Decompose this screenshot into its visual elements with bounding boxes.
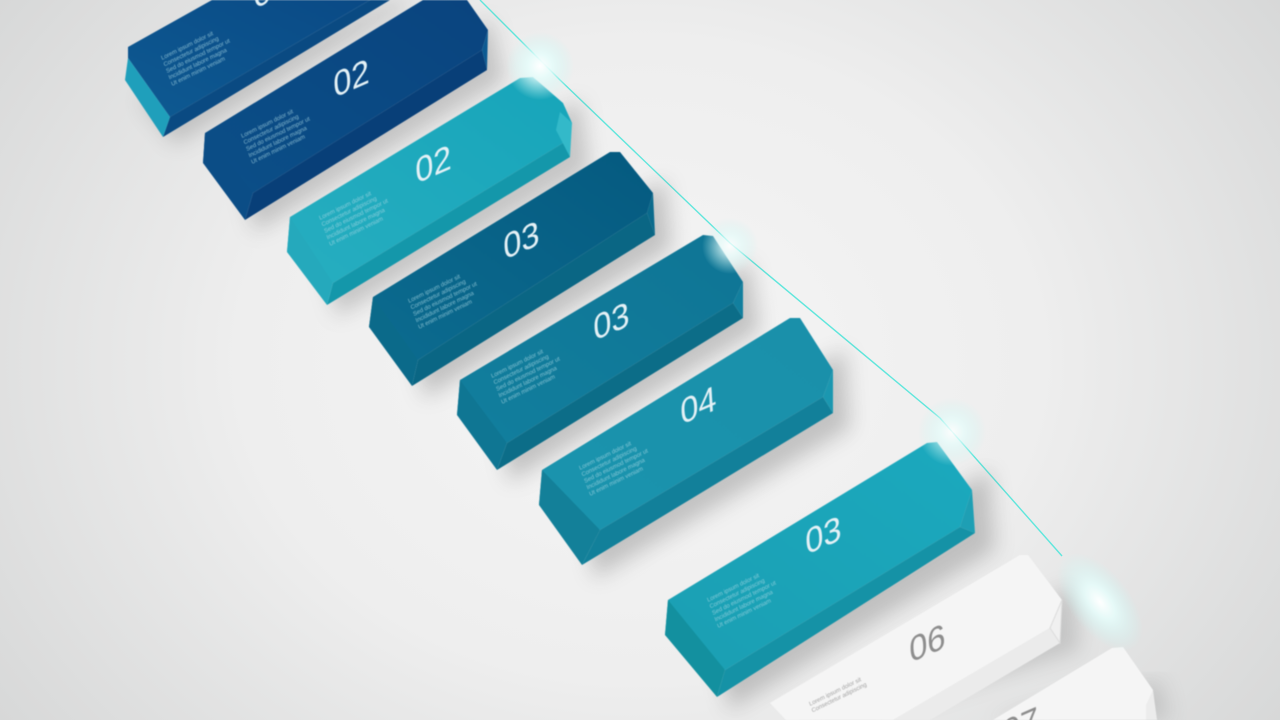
text block 03 deep: Incididunt labore magna [415,290,475,324]
text block 03 mid: Ut enim minim veniam [501,374,556,406]
text block 02 navy: Lorem ipsum dolor sit [241,109,295,140]
text block 03 bright: Consectetur adipiscing [709,578,766,610]
text block 03 deep: Sed do eiusmod tempor ut [413,281,478,318]
bar 05: mid teal blue [457,235,760,482]
number 03 bright: 03 [804,508,842,563]
text block 01: Incididunt labore magna [168,47,228,81]
number 02 teal: 02 [414,137,452,192]
number 06: 06 [908,616,946,671]
text block 03 mid: Sed do eiusmod tempor ut [496,356,561,393]
text block 03 mid: Incididunt labore magna [498,365,558,399]
bar 04: deep teal blue [369,152,672,398]
bar 08: white [770,555,1080,720]
text block 03 bright: Sed do eiusmod tempor ut [712,580,777,617]
bar 06: teal blue [539,318,850,578]
bar 07: bright teal [665,442,995,710]
text block 04: Ut enim minim veniam [589,466,644,498]
bar 02: navy [203,0,505,232]
text block 02 navy: Sed do eiusmod tempor ut [246,116,311,153]
number 03 deep: 03 [502,213,540,268]
glow points [506,32,1159,666]
text block 03 bright: Lorem ipsum dolor sit [707,573,761,604]
number 02 navy: 02 [332,51,370,106]
text block 04: Sed do eiusmod tempor ut [584,448,649,485]
text block 01: Consectetur adipiscing [163,36,220,68]
text block 03 bright: Ut enim minim veniam [717,598,772,630]
text block 03 deep: Lorem ipsum dolor sit [408,274,462,305]
text block 02 navy: Consectetur adipiscing [243,114,300,146]
text block 03 deep: Consectetur adipiscing [410,279,467,311]
text block 04: Incididunt labore magna [586,457,646,491]
number 03 mid: 03 [592,294,630,349]
text block 02 teal: Consectetur adipiscing [321,196,378,228]
bar 03: light teal [287,77,590,316]
bar 09: white [990,647,1170,720]
text block 02 teal: Ut enim minim veniam [329,216,384,248]
text block 02 teal: Lorem ipsum dolor sit [319,191,373,222]
text block 06: Consectetur adipiscing [811,682,868,714]
bar 01: dark blue [125,0,410,145]
text block 01: Sed do eiusmod tempor ut [166,38,231,75]
text block 03 mid: Consectetur adipiscing [493,354,550,386]
text block 03 bright: Incididunt labore magna [714,589,774,623]
text block 06: Lorem ipsum dolor sit [809,677,863,708]
glowing connector line [480,0,1062,556]
text block 01: Lorem ipsum dolor sit [161,31,215,62]
text block 02 navy: Incididunt labore magna [248,125,308,159]
text block 04: Lorem ipsum dolor sit [579,441,633,472]
text block 03 mid: Lorem ipsum dolor sit [491,349,545,380]
text block 02 teal: Incididunt labore magna [326,207,386,241]
text block 02 teal: Sed do eiusmod tempor ut [324,198,389,235]
text block 03 deep: Ut enim minim veniam [418,299,473,331]
text block 04: Consectetur adipiscing [581,446,638,478]
text block 01: Ut enim minim veniam [171,56,226,88]
text block 02 navy: Ut enim minim veniam [251,134,306,166]
number 04: 04 [679,378,717,433]
